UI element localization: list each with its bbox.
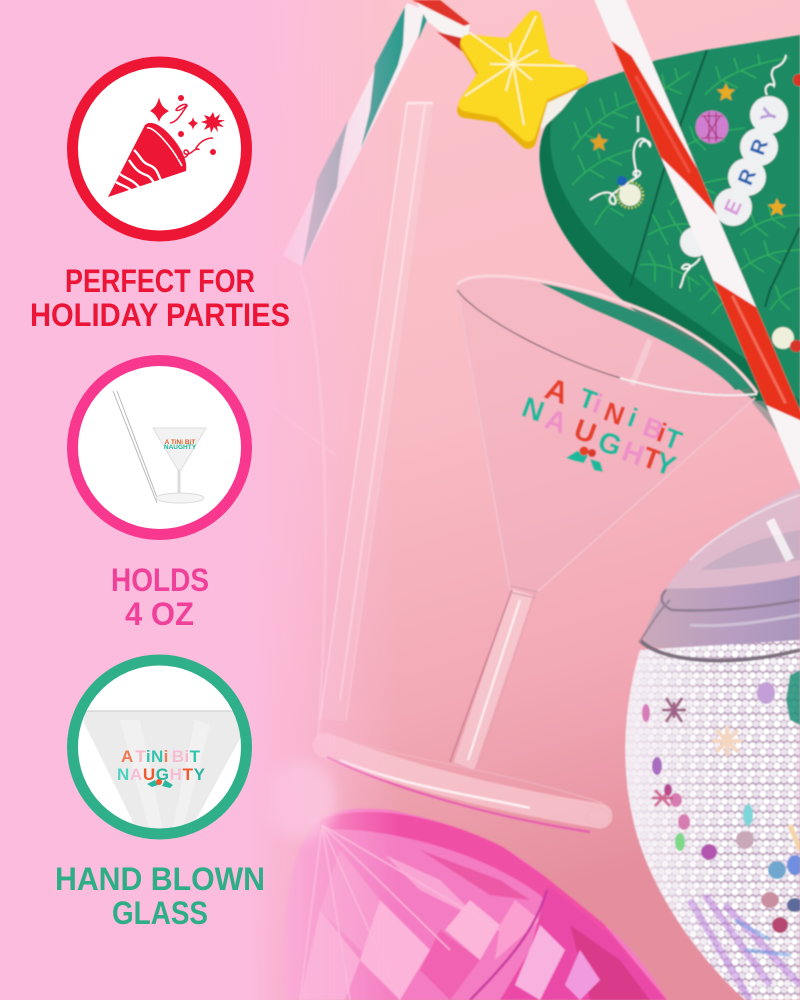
merry beads: R bbox=[746, 136, 773, 158]
printed glass slogan: G bbox=[594, 426, 626, 463]
lights string bbox=[590, 116, 650, 204]
pale blob left of ornament bbox=[264, 760, 336, 840]
printed glass slogan: i bbox=[589, 388, 606, 419]
icon circle: glass and straw: NAUGHTY bbox=[164, 444, 197, 451]
globe lid band bbox=[645, 575, 800, 652]
printed glass slogan: T bbox=[575, 382, 601, 416]
globe lid dome bbox=[665, 488, 800, 590]
icon circle: glass close-up bbox=[72, 660, 246, 840]
label: hand blown glass: HAND BLOWN bbox=[55, 861, 265, 897]
teal reflection bbox=[786, 670, 800, 725]
martini rim bbox=[457, 276, 757, 393]
glitter confetti bbox=[642, 682, 800, 1000]
icon circle: glass close-up: ATiNiBiT bbox=[121, 747, 201, 766]
gold stars bbox=[590, 133, 608, 151]
icon circle: glass close-up: NAUGHTY bbox=[117, 765, 206, 784]
printed glass slogan: A bbox=[541, 404, 571, 441]
printed glass slogan: B bbox=[639, 411, 668, 446]
merry beads: E bbox=[720, 196, 747, 218]
icon circle: party popper bbox=[72, 62, 246, 236]
feature: holds 4 oz bbox=[72, 360, 246, 632]
purple foil streaks bbox=[690, 895, 800, 1000]
martini bowl bbox=[457, 276, 755, 590]
red candy straw bbox=[593, 0, 800, 512]
printed glass slogan: i bbox=[653, 417, 670, 448]
printed glass slogan: T bbox=[660, 422, 686, 456]
feature: hand blown glass bbox=[55, 660, 265, 931]
teal striped straw bbox=[283, 3, 430, 267]
yellow star topper bbox=[465, 16, 580, 141]
globe rim bbox=[640, 640, 800, 661]
printed glass slogan: N bbox=[518, 392, 548, 429]
ornament ball bbox=[696, 110, 728, 144]
martini base tube bbox=[325, 745, 600, 816]
label: holds 4 oz: 4 OZ bbox=[125, 596, 194, 632]
grey tree reflection beyond bowl bbox=[750, 400, 800, 440]
photo scene: party cups and straws bbox=[264, 0, 800, 1000]
printed glass slogan bbox=[518, 371, 686, 483]
merry beads bbox=[680, 96, 788, 257]
label: hand blown glass: GLASS bbox=[112, 895, 208, 931]
ornament rim bbox=[320, 812, 667, 1000]
snowflakes bbox=[662, 698, 686, 722]
icon circle: glass and straw: A TiNi BiT bbox=[165, 439, 195, 446]
left pink fade panel bbox=[0, 0, 400, 1000]
label: holds 4 oz bbox=[111, 562, 209, 632]
light bulb bbox=[617, 182, 643, 208]
feature: party bbox=[30, 62, 290, 333]
merry beads: Y bbox=[756, 105, 783, 125]
merry beads: R bbox=[734, 166, 761, 189]
green band seen through rim bbox=[540, 283, 755, 390]
printed glass slogan: A bbox=[541, 371, 574, 411]
martini stem bbox=[464, 592, 523, 766]
ghost glass reflections bbox=[270, 270, 335, 740]
tree needles bbox=[572, 54, 800, 325]
printed glass slogan: U bbox=[570, 414, 600, 451]
label: hand blown glass bbox=[55, 861, 265, 931]
red striped straw behind star bbox=[412, 0, 470, 52]
icon circle: glass and straw bbox=[72, 360, 246, 534]
printed glass slogan: H bbox=[618, 436, 648, 473]
printed glass slogan: N bbox=[600, 396, 629, 431]
printed glass slogan: i bbox=[624, 402, 641, 433]
metallic right side bbox=[500, 900, 590, 1000]
martini glass bbox=[325, 276, 800, 832]
glass straw bbox=[320, 103, 433, 720]
tree seams bbox=[630, 50, 800, 307]
label: perfect for holiday parties bbox=[30, 263, 290, 333]
label: perfect for holiday parties: HOLIDAY PARTIES bbox=[30, 297, 290, 333]
second bulb bbox=[772, 327, 794, 349]
seam bbox=[470, 890, 547, 1000]
star connector bbox=[540, 90, 578, 130]
christmas tree cup bbox=[539, 35, 800, 435]
pink faceted ornament bbox=[270, 800, 670, 1000]
printed glass slogan: T bbox=[638, 442, 665, 478]
label: perfect for holiday parties: PERFECT FOR bbox=[65, 263, 255, 299]
printed glass slogan: Y bbox=[651, 447, 680, 483]
facet lines bbox=[300, 825, 500, 1000]
label: holds 4 oz: HOLDS bbox=[111, 562, 209, 598]
popper cone bbox=[108, 123, 186, 197]
glitter globe cup bbox=[620, 488, 800, 1000]
